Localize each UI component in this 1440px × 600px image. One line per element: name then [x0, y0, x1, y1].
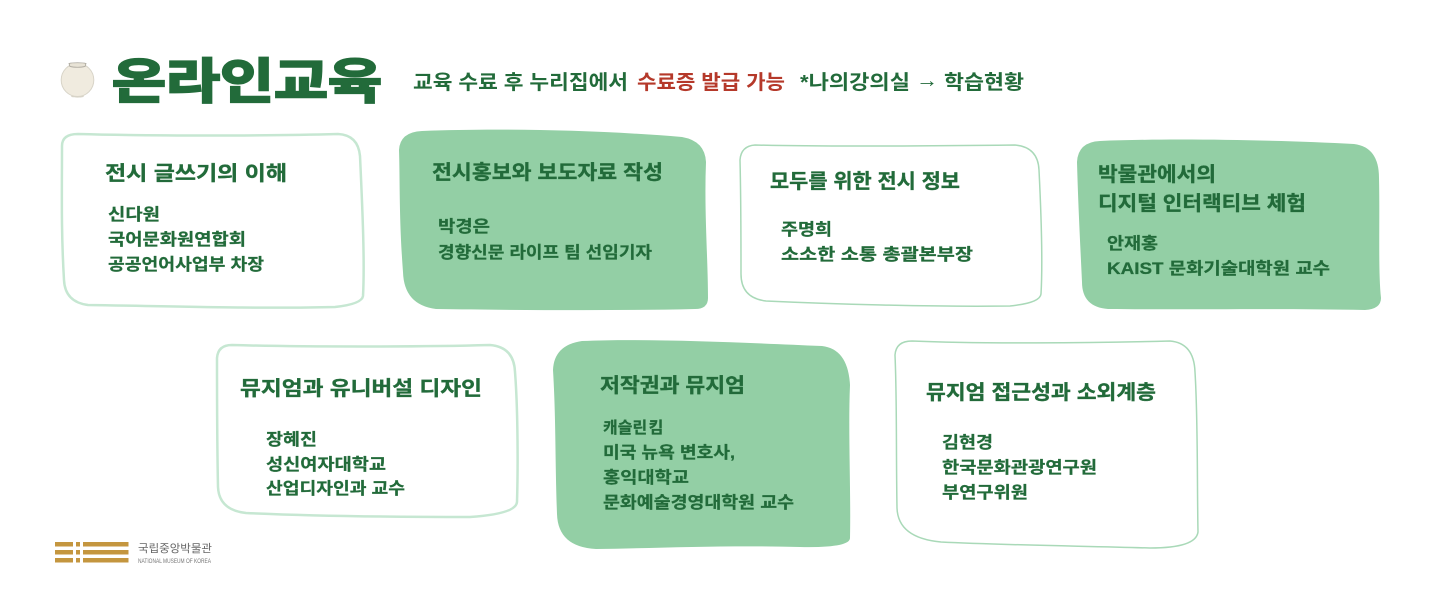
panel: digital interactive experience: [1077, 140, 1381, 310]
speaker: [781, 220, 973, 264]
learning status: 학습현황: [944, 71, 1024, 94]
panel: accessible exhibition info: [740, 145, 1042, 306]
logo English name: NATIONAL MUSEUM OF KOREA: [138, 559, 211, 565]
heading: 박물관에서의: [1098, 163, 1216, 186]
panel: exhibition writing: [62, 134, 364, 308]
icon: moon jar: [61, 63, 94, 98]
icon: gold bars: [55, 542, 128, 562]
speaker: 산업디자인과 교수: [266, 479, 405, 498]
speaker: 김현경: [942, 433, 993, 452]
logo: National Museum of Korea: [55, 542, 212, 565]
speaker: 홍익대학교: [603, 468, 689, 487]
heading: [1098, 163, 1306, 215]
speaker: [1107, 234, 1330, 278]
speaker: 신다원: [108, 205, 160, 224]
subtitle notice: [413, 70, 1024, 94]
title: 온라인교육: [112, 56, 382, 109]
heading: 전시 글쓰기의 이해: [105, 162, 287, 185]
speaker: [108, 205, 264, 274]
speaker: 캐슬린 킴: [603, 419, 663, 437]
speaker: 장혜진: [266, 430, 317, 449]
heading: 모두를 위한 전시 정보: [770, 170, 960, 193]
speaker: 문화예술경영대학원 교수: [603, 493, 794, 512]
speaker: 경향신문 라이프 팀 선임기자: [438, 243, 652, 262]
subtitle notice: 교육 수료 후 누리집에서: [413, 71, 628, 94]
logo Korean name: 국립중앙박물관: [138, 542, 212, 555]
speaker: 한국문화관광연구원: [942, 458, 1097, 477]
lecture room: *나의강의실: [800, 71, 910, 94]
arrow: →: [916, 70, 938, 92]
speaker: 소소한 소통 총괄본부장: [781, 245, 973, 264]
speaker: 주명희: [781, 220, 832, 239]
speaker: KAIST 문화기술대학원 교수: [1107, 259, 1330, 278]
highlighted notice: 수료증 발급 가능: [637, 71, 785, 94]
speaker: 박경은: [438, 217, 490, 236]
panel: press release: [399, 130, 708, 310]
speaker: 국어문화원연합회: [108, 230, 246, 249]
speaker: [603, 419, 794, 512]
speaker: [942, 433, 1097, 502]
speaker: [438, 217, 652, 262]
heading: 뮤지엄 접근성과 소외계층: [926, 381, 1156, 404]
panel: museum accessibility: [895, 341, 1198, 548]
heading: 저작권과 뮤지엄: [600, 374, 745, 397]
speaker: [266, 430, 405, 498]
heading: 뮤지엄과 유니버설 디자인: [240, 377, 482, 400]
panel: universal design: [217, 345, 518, 517]
speaker: 부연구위원: [942, 483, 1028, 502]
speaker: 공공언어사업부 차장: [108, 255, 264, 274]
heading: 전시홍보와 보도자료 작성: [432, 161, 663, 184]
panel: copyright and museum: [553, 340, 850, 549]
heading: 디지털 인터랙티브 체험: [1098, 192, 1306, 215]
speaker: 성신여자대학교: [266, 455, 386, 474]
speaker: 안재홍: [1107, 234, 1158, 253]
speaker: 미국 뉴욕 변호사,: [603, 443, 735, 462]
